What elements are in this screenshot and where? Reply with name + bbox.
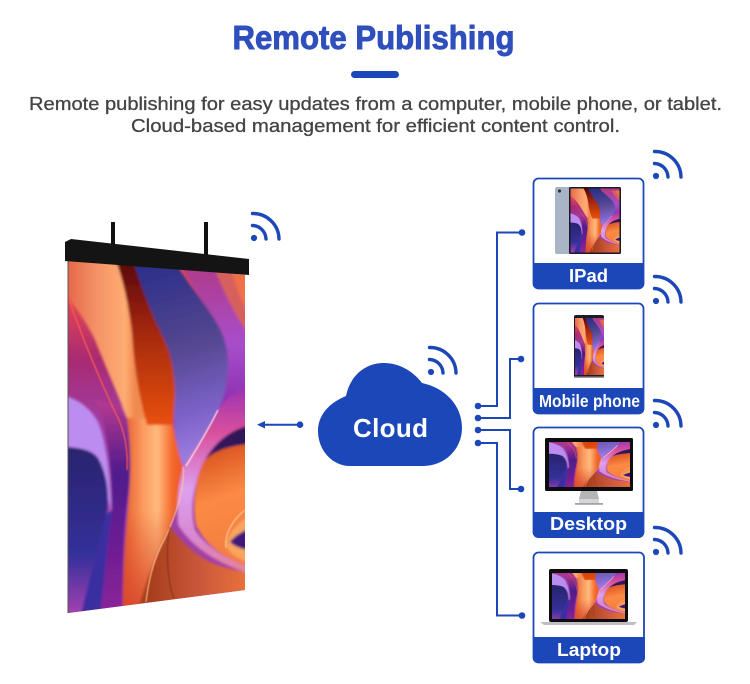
description text: Cloud-based management for efficient content control. bbox=[131, 115, 620, 136]
top mounting bar bbox=[65, 239, 249, 275]
description text bbox=[29, 93, 722, 136]
icon: wifi on display bbox=[251, 213, 279, 241]
screen artwork bbox=[68, 261, 245, 613]
icon: laptop bbox=[540, 569, 637, 625]
panel: Desktop bbox=[532, 426, 644, 538]
double arrow display to cloud bbox=[257, 421, 303, 428]
cloud: Cloud bbox=[353, 413, 428, 443]
panel: Laptop bbox=[533, 540, 645, 663]
panel: iPad bbox=[533, 178, 644, 289]
panel: Mobile phone: Mobile phone bbox=[539, 391, 640, 411]
title underline bbox=[351, 71, 399, 78]
panel: Desktop: Desktop bbox=[550, 514, 627, 534]
description text: Remote publishing for easy updates from a computer, mobile phone, or tablet. bbox=[29, 93, 722, 114]
icon: wifi on Desktop bbox=[653, 400, 681, 428]
connectors cloud to devices bbox=[475, 229, 525, 619]
title: Remote Publishing bbox=[232, 19, 514, 56]
icon: monitor bbox=[545, 438, 633, 505]
panel: Mobile phone bbox=[533, 304, 644, 414]
icon: wifi on Laptop bbox=[653, 527, 681, 555]
icon: wifi on cloud bbox=[428, 347, 456, 375]
icon: tablet bbox=[555, 187, 622, 254]
icon: wifi on Mobile phone bbox=[653, 276, 681, 304]
hanging LED display bbox=[60, 222, 255, 620]
panel: iPad: IPad bbox=[569, 266, 608, 286]
cloud bbox=[318, 363, 462, 466]
hanging rods bbox=[111, 222, 208, 256]
icon: phone bbox=[574, 315, 606, 378]
panel: Laptop: Laptop bbox=[557, 640, 621, 660]
icon: wifi on iPad bbox=[653, 151, 681, 179]
